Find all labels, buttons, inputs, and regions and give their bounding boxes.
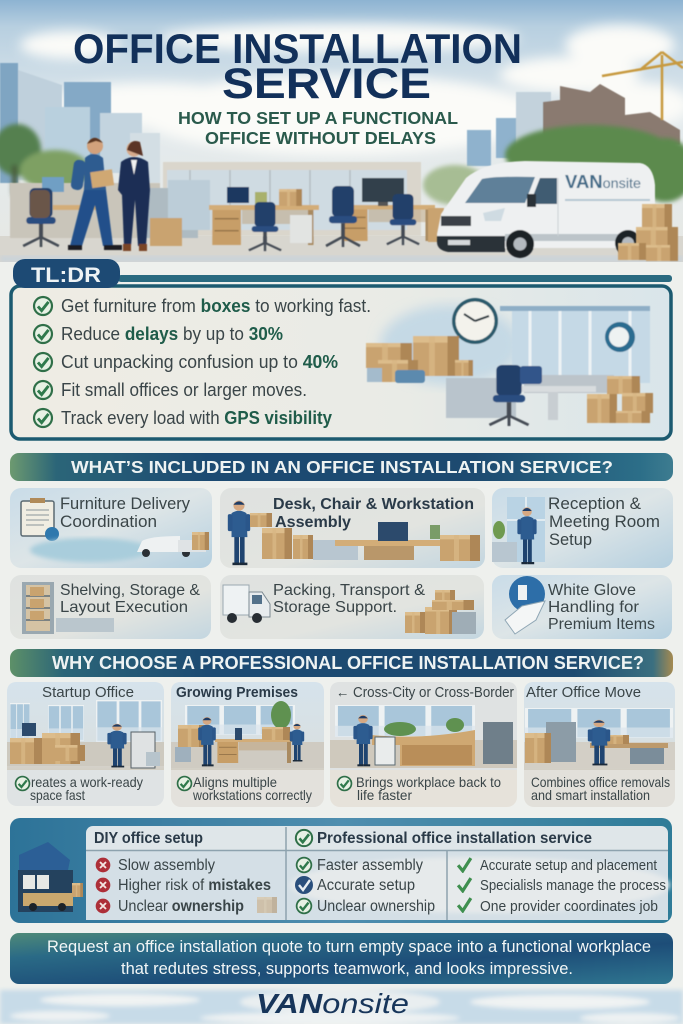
right skyline and castle xyxy=(467,52,683,166)
TL;DR illustration: clocks, boxes and office xyxy=(366,298,653,426)
delivery van xyxy=(437,161,655,258)
call to action banner: Request an office installation quote to turn empty space into a functional workplace xyxy=(47,938,651,956)
DIY column: Higher risk of mistakes xyxy=(118,877,271,894)
header illustration: sky, city, office and van xyxy=(0,0,683,262)
subtitle xyxy=(178,108,458,148)
panel: white glove handling xyxy=(492,575,672,639)
panel: after office move xyxy=(524,682,675,807)
panel: shelving, storage and layout execution: Shelving, Storage & xyxy=(60,582,200,599)
TL;DR bullet list: Reduce delays by up to 30% xyxy=(61,323,283,344)
professional benefits column: Accurate setup and placement xyxy=(480,858,657,874)
panel: TL;DR xyxy=(11,259,672,439)
panel: desk, chair and workstation assembly xyxy=(220,488,485,568)
TL;DR bullet list: Cut unpacking confusion up to 40% xyxy=(61,351,338,372)
panel: furniture delivery coordination: Furniture Delivery xyxy=(60,495,191,513)
panel: packing, transport and storage support xyxy=(220,575,484,639)
panel: furniture delivery coordination xyxy=(10,488,212,568)
DIY column xyxy=(94,830,277,915)
panel: cross-city or cross-border xyxy=(330,682,517,807)
panel: shelving, storage and layout execution: Layout Execution xyxy=(60,599,188,616)
panel: growing premises: Growing Premises xyxy=(176,685,298,701)
TL;DR box xyxy=(11,286,671,439)
TL;DR bullet list: Track every load with GPS visibility xyxy=(61,407,333,428)
panel: after office move: and smart installation xyxy=(531,787,650,803)
panel: growing premises: workstations correctly xyxy=(192,787,312,803)
TL;DR tab: TL:DR xyxy=(31,264,101,287)
professional column: Accurate setup xyxy=(317,877,415,894)
panel: reception and meeting room setup: Meeting Room xyxy=(549,513,660,531)
panel: reception and meeting room setup xyxy=(492,488,673,568)
icon: gloved hand holding item xyxy=(505,576,545,634)
panel: growing premises xyxy=(171,682,324,807)
panel: startup office: Startup Office xyxy=(42,685,134,701)
professional benefits column: One provider coordinates job xyxy=(480,899,658,915)
TL;DR tab xyxy=(13,259,120,288)
panel: startup office: space fast xyxy=(30,787,85,803)
professional benefits column: Specialisls manage the process xyxy=(480,878,666,894)
icon: warehouse and truck xyxy=(18,842,83,912)
panel: desk, chair and workstation assembly: Assembly xyxy=(275,514,351,531)
section heading: what's included: WHAT’S INCLUDED IN AN OFFICE INSTALLATION SERVICE? xyxy=(71,457,613,477)
professional benefits column xyxy=(458,858,666,915)
icon: clipboard xyxy=(21,498,59,541)
subtitle: HOW TO SET UP A FUNCTIONAL xyxy=(178,108,458,128)
professional column: Unclear ownership xyxy=(317,898,435,915)
panel: reception and meeting room setup: Setup xyxy=(549,531,592,549)
title: SERVICE xyxy=(222,60,431,108)
panel: cross-city or cross-border: life faster xyxy=(357,787,412,803)
panel: shelving, storage and layout execution xyxy=(10,575,211,639)
stacked boxes xyxy=(618,204,678,261)
delivery van: VANonsite xyxy=(565,172,641,192)
professional column: Faster assembly xyxy=(317,857,423,874)
panel: growing premises: Aligns multiple xyxy=(193,774,277,790)
section heading: why choose: WHY CHOOSE A PROFESSIONAL OFFICE INSTALLATION SERVICE? xyxy=(52,653,644,673)
professional column: Professional office installation service xyxy=(317,830,592,847)
section heading: why choose xyxy=(10,649,673,677)
footer clouds xyxy=(0,990,683,1024)
panel: cross-city or cross-border: ← Cross-City or Cross-Border xyxy=(336,685,514,701)
left skyline xyxy=(0,63,160,183)
panel: white glove handling: Premium Items xyxy=(548,616,655,633)
panel: startup office xyxy=(7,682,164,806)
panel: DIY vs professional comparison xyxy=(10,818,672,923)
panel: after office move: After Office Move xyxy=(526,685,641,701)
DIY column: DIY office setup xyxy=(94,830,203,847)
panel: cross-city or cross-border: Brings workplace back to xyxy=(356,774,501,790)
panel: packing, transport and storage support: Storage Support. xyxy=(273,599,397,616)
panel: packing, transport and storage support: Packing, Transport & xyxy=(273,582,425,599)
title xyxy=(73,25,522,108)
panel: furniture delivery coordination: Coordination xyxy=(60,513,157,531)
call to action banner xyxy=(10,933,673,984)
panel: white glove handling: Handling for xyxy=(548,599,640,616)
ground xyxy=(0,236,683,262)
DIY column: Slow assembly xyxy=(118,857,215,874)
panel: desk, chair and workstation assembly: Desk, Chair & Workstation xyxy=(273,496,474,513)
call to action banner: that redutes stress, supports teamwork, and looks impressive. xyxy=(121,960,573,978)
panel: white glove handling: White Glove xyxy=(548,582,636,599)
subtitle: OFFICE WITHOUT DELAYS xyxy=(205,128,436,148)
footer logo: VAN onsite xyxy=(256,988,409,1019)
professional column xyxy=(295,829,592,915)
title: OFFICE INSTALLATION xyxy=(73,25,522,72)
TL;DR bullet list xyxy=(33,295,371,428)
panel: reception and meeting room setup: Reception & xyxy=(548,495,641,513)
TL;DR bullet list: Fit small offices or larger moves. xyxy=(61,379,307,400)
office structure xyxy=(10,162,444,251)
people xyxy=(68,138,150,251)
panel: startup office: reates a work-ready xyxy=(31,774,143,790)
DIY column: Unclear ownership xyxy=(118,898,244,915)
TL;DR top strip xyxy=(118,275,672,282)
section heading: what's included xyxy=(10,453,673,481)
TL;DR bullet list: Get furniture from boxes to working fast. xyxy=(61,295,371,316)
